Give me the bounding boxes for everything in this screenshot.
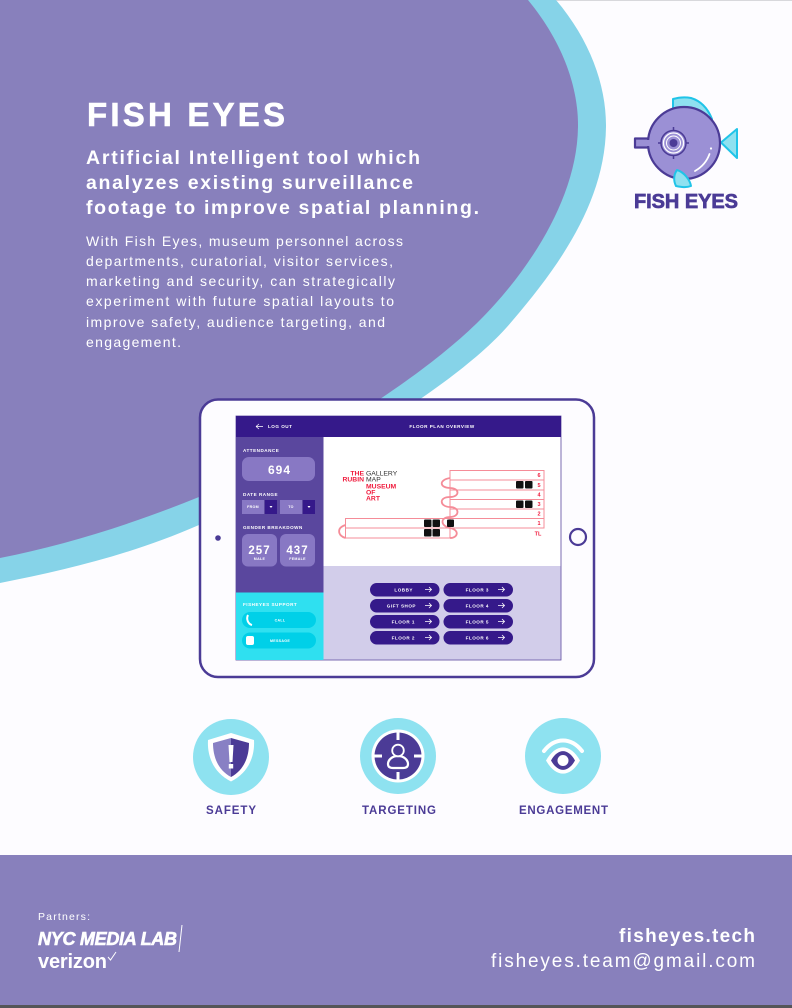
- gallery map logo: RUBIN: [342, 476, 364, 484]
- screen: [236, 416, 561, 660]
- panel: floor buttons: FLOOR 3: [466, 588, 489, 592]
- panel: floor plan header: FLOOR PLAN OVERVIEW: [409, 424, 475, 429]
- floor plan map: 5: [537, 483, 541, 489]
- gallery map logo: MAP: [366, 476, 381, 484]
- gender breakdown: 257: [248, 545, 271, 557]
- icon: eye: [525, 718, 601, 794]
- gallery map logo: OF: [366, 490, 375, 496]
- panel: support: [236, 592, 324, 660]
- description: marketing and security, can strategically: [86, 273, 395, 289]
- attendance: [242, 448, 315, 481]
- description: improve safety, audience targeting, and: [86, 314, 385, 330]
- tablet frame: [200, 400, 594, 677]
- floor plan map: 6: [537, 473, 541, 479]
- footer: [0, 855, 792, 1008]
- description: engagement.: [86, 334, 181, 350]
- panel: support: FISHEYES SUPPORT: [243, 602, 297, 607]
- subtitle: [86, 147, 479, 219]
- description: With Fish Eyes, museum personnel across: [86, 233, 403, 249]
- email: fisheyes.team@gmail.com: [491, 951, 755, 972]
- subtitle: Artificial Intelligent tool which: [86, 147, 420, 169]
- panel: floor buttons: FLOOR 4: [466, 604, 489, 608]
- log out: LOG OUT: [268, 424, 292, 429]
- panel: sidebar: [236, 416, 324, 593]
- gender breakdown: MALE: [254, 557, 265, 561]
- icon: shield: [193, 719, 269, 795]
- floor plan map: 3: [537, 502, 541, 508]
- icon: fish: [635, 97, 737, 187]
- floor plan map: 4: [537, 492, 541, 498]
- partners label: Partners:: [38, 911, 90, 923]
- floor plan map: 2: [537, 512, 541, 518]
- label: engagement: ENGAGEMENT: [519, 805, 608, 817]
- panel: floor buttons: FLOOR 2: [392, 636, 415, 640]
- icon: target person: [360, 718, 436, 794]
- website: fisheyes.tech: [619, 926, 755, 947]
- label: targeting: TARGETING: [362, 805, 436, 817]
- gallery map logo: ART: [366, 496, 381, 502]
- panel: floor buttons: FLOOR 1: [392, 620, 415, 624]
- targeting feature: [360, 718, 436, 817]
- floor plan map: [339, 470, 544, 538]
- description: [86, 233, 403, 350]
- tablet: [200, 400, 594, 677]
- gallery map logo: MUSEUM: [366, 484, 397, 490]
- gender breakdown: FEMALE: [289, 557, 306, 561]
- log out: [256, 424, 292, 429]
- partner logo: verizon: verizon: [38, 951, 107, 973]
- panel: floor buttons: GIFT SHOP: [387, 604, 416, 608]
- engagement feature: [519, 718, 608, 817]
- background swoosh: [0, 0, 606, 583]
- safety feature: [193, 719, 269, 817]
- gallery map logo: THE: [350, 470, 364, 478]
- front camera: [215, 535, 221, 541]
- title: FISH EYES: [87, 96, 285, 133]
- attendance: ATTENDANCE: [243, 448, 279, 453]
- floor plan map: 1: [537, 521, 541, 527]
- fish logo: [634, 97, 738, 213]
- panel: floor buttons: LOBBY: [394, 588, 413, 592]
- panel: floor buttons: FLOOR 6: [466, 636, 489, 640]
- date range: FROM: [247, 505, 259, 509]
- date range: DATE RANGE: [243, 492, 278, 497]
- subtitle: footage to improve spatial planning.: [86, 197, 479, 219]
- logo wordmark: FISH EYES: [634, 191, 738, 213]
- gender breakdown: [242, 525, 315, 566]
- floor plan map: TL: [535, 532, 542, 538]
- panel: floor buttons: [324, 566, 560, 660]
- gallery map logo: GALLERY: [366, 470, 398, 478]
- description: experiment with future spatial layouts to: [86, 293, 394, 309]
- partner logo: nyc media lab: NYC MEDIA LAB: [38, 929, 177, 949]
- panel: support: CALL: [275, 618, 286, 622]
- gender breakdown: 437: [286, 545, 309, 557]
- gallery map logo: [342, 470, 398, 502]
- gender breakdown: GENDER BREAKDOWN: [243, 525, 303, 530]
- label: safety: SAFETY: [206, 805, 256, 817]
- panel: support: MESSAGE: [270, 639, 290, 643]
- panel: floor buttons: FLOOR 5: [466, 620, 489, 624]
- attendance: 694: [268, 463, 291, 477]
- home button: [570, 529, 586, 545]
- date range: [242, 492, 315, 514]
- subtitle: analyzes existing surveillance: [86, 172, 413, 194]
- description: departments, curatorial, visitor services,: [86, 253, 393, 269]
- date range: TO: [288, 505, 294, 509]
- panel: floor plan header: [324, 416, 561, 437]
